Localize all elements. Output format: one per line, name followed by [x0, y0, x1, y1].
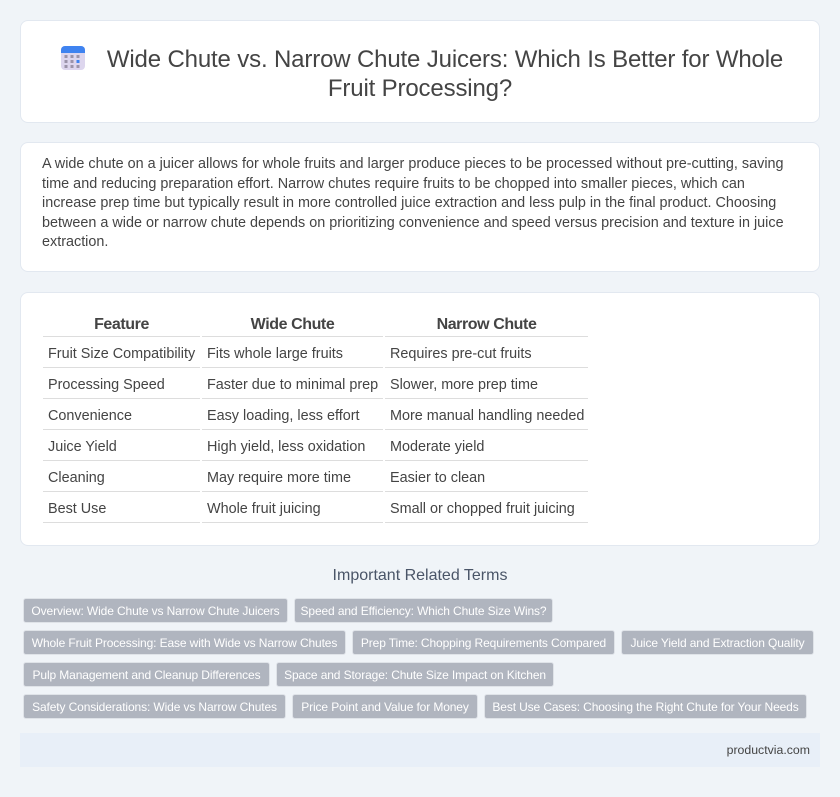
related term tags: [23, 598, 814, 719]
row: fruit size: Fruit Size Compatibility: [48, 346, 195, 362]
row: speed: Processing Speed: [48, 377, 165, 393]
related term tags: Whole Fruit Processing: Ease with Wide vs Narrow Chutes: [32, 636, 337, 650]
row: speed: Faster due to minimal prep: [207, 377, 378, 393]
row: convenience: More manual handling needed: [390, 408, 584, 424]
related term tags: Pulp Management and Cleanup Differences: [33, 668, 260, 682]
table header: Wide Chute: [251, 316, 334, 333]
row: fruit size: [48, 346, 532, 362]
row: cleaning: May require more time: [207, 470, 351, 486]
related term tags: Juice Yield and Extraction Quality: [630, 636, 805, 650]
table header: [94, 316, 536, 333]
footer: [20, 733, 820, 767]
related term tags: Space and Storage: Chute Size Impact on Kitchen: [284, 668, 546, 682]
intro paragraph: A wide chute on a juicer allows for whole fruits and larger produce pieces to be processed without pre-cutting, saving: [42, 156, 784, 172]
table header: Feature: [94, 316, 149, 333]
row: convenience: Convenience: [48, 408, 132, 424]
related term tags: Speed and Efficiency: Which Chute Size Wins?: [301, 604, 546, 618]
intro paragraph: between a wide or narrow chute depends on prioritizing convenience and speed versus precision and texture in juice: [42, 214, 784, 230]
row: speed: Slower, more prep time: [390, 377, 538, 393]
row: speed: [48, 377, 538, 393]
row: yield: [48, 439, 484, 455]
title: Fruit Processing?: [328, 75, 512, 102]
comparison table: [43, 316, 588, 523]
row: best use: Whole fruit juicing: [207, 501, 321, 517]
row: cleaning: [48, 470, 485, 486]
row: best use: Best Use: [48, 501, 106, 517]
panel: title header: [20, 20, 820, 123]
panel: comparison table: [20, 292, 820, 546]
row: yield: High yield, less oxidation: [207, 439, 365, 455]
related term tags: Overview: Wide Chute vs Narrow Chute Juicers: [31, 604, 280, 618]
row: convenience: Easy loading, less effort: [207, 408, 360, 424]
icon: calendar: [61, 46, 85, 70]
intro paragraph: extraction.: [42, 234, 108, 250]
table header: Narrow Chute: [437, 316, 536, 333]
row: fruit size: Fits whole large fruits: [207, 346, 343, 362]
row: best use: Small or chopped fruit juicing: [390, 501, 575, 517]
panel: intro text: [20, 142, 820, 272]
row: cleaning: Easier to clean: [390, 470, 485, 486]
footer site name: productvia.com: [727, 743, 810, 757]
row: best use: [48, 501, 575, 517]
row: yield: Juice Yield: [48, 439, 117, 455]
intro paragraph: [42, 156, 784, 250]
related term tags: Safety Considerations: Wide vs Narrow Chutes: [32, 700, 277, 714]
related term tags: Price Point and Value for Money: [301, 700, 469, 714]
row: yield: Moderate yield: [390, 439, 484, 455]
heading: related terms: Important Related Terms: [333, 567, 507, 584]
title: Wide Chute vs. Narrow Chute Juicers: Which Is Better for Whole: [107, 46, 783, 73]
title: [107, 46, 783, 102]
intro paragraph: time and reducing preparation effort. Narrow chutes require fruits to be chopped into smaller pieces, which can: [42, 176, 745, 192]
related term tags: Best Use Cases: Choosing the Right Chute for Your Needs: [492, 700, 799, 714]
related term tags: Prep Time: Chopping Requirements Compared: [361, 636, 606, 650]
row: convenience: [48, 408, 584, 424]
row: fruit size: Requires pre-cut fruits: [390, 346, 532, 362]
intro paragraph: increase prep time but typically result in more controlled juice extraction and less pulp in the final product. Choosing: [42, 195, 776, 211]
row: cleaning: Cleaning: [48, 470, 105, 486]
